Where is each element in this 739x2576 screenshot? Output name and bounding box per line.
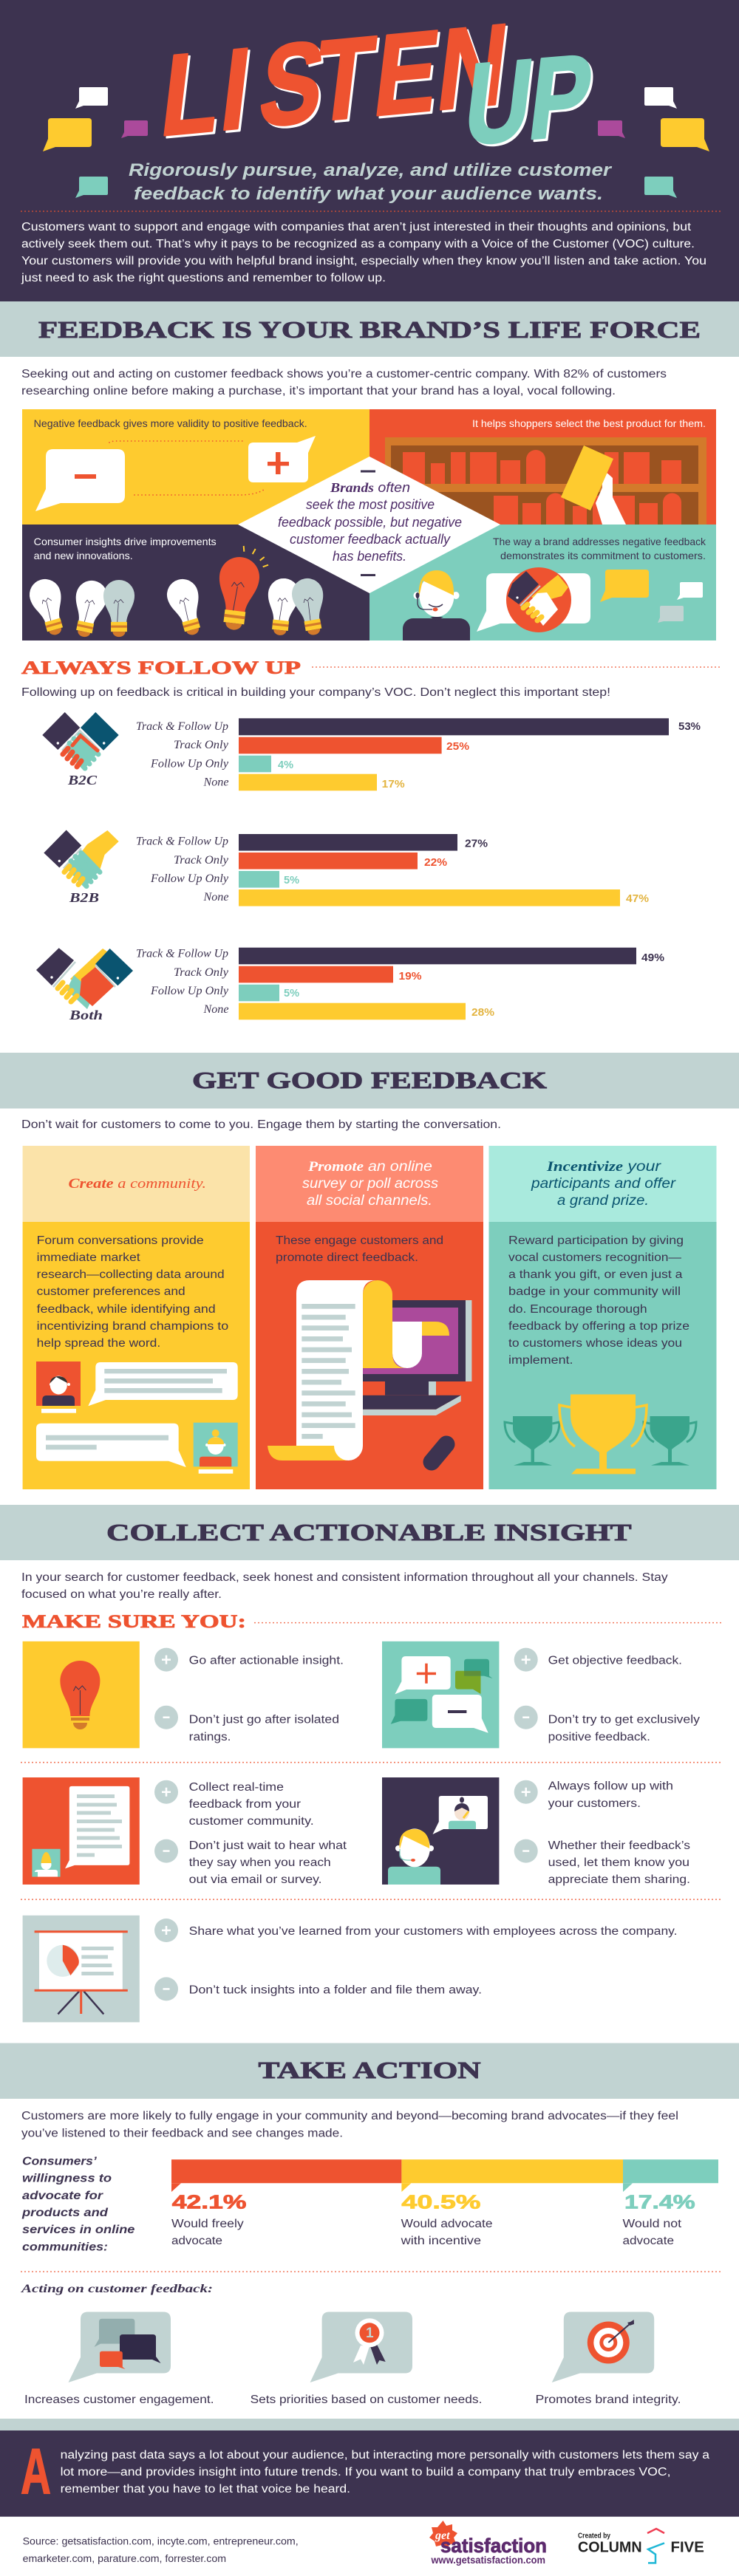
chart: B2C: B2C — [67, 773, 98, 788]
panel: create a community: feedback, while identifying and — [37, 1303, 216, 1316]
text: sources: Source: getsatisfaction.com, incyte.com, entrepreneur.com, — [23, 2535, 299, 2547]
subtitle: feedback to identify what your audience wants. — [134, 184, 603, 204]
chart: advocacy stacked bar: Would not — [622, 2218, 682, 2230]
chart: B2B: Track Only — [174, 854, 229, 867]
text: consumers willingness label: willingness to — [22, 2173, 112, 2185]
panel: follow up tip — [382, 1777, 690, 1886]
panel: promote survey — [256, 1146, 483, 1489]
panel: promote survey: Promote an online — [307, 1159, 432, 1175]
icon: B2B handshake — [44, 830, 119, 886]
icon: customer engagement — [68, 2312, 171, 2382]
text: consumers willingness label: Consumers’ — [22, 2156, 97, 2167]
panel: create a community: incentivizing brand champions to — [37, 1320, 228, 1333]
text: Sets priorities based on customer needs. — [251, 2394, 482, 2406]
icon: ribbon priority: 1 — [366, 2326, 374, 2341]
chart: both: None — [202, 1003, 229, 1016]
panel: create a community: research—collecting data around — [37, 1268, 225, 1281]
panel: brand commitment — [370, 525, 716, 640]
chart: B2C: 4% — [278, 759, 293, 771]
icon: minus bubble — [35, 449, 125, 511]
icon: plus bubble — [248, 436, 316, 482]
logo: get satisfaction: www.getsatisfaction.com — [431, 2555, 545, 2566]
text: collect intro: focused on what you’re really after. — [21, 1588, 222, 1601]
heading: always follow up: ALWAYS FOLLOW UP — [21, 658, 301, 678]
text: follow up intro: Following up on feedback is critical in building your company’s VOC. Don’t neglect this important step! — [21, 686, 610, 699]
panel: create a community: immediate market — [37, 1251, 140, 1264]
panel: shoppers bookshelf — [370, 409, 716, 525]
icon: speech bubbles left — [43, 87, 148, 198]
panel: incentivize: a thank you gift, or even just a — [508, 1268, 683, 1281]
chart: B2C: Track Only — [174, 739, 229, 751]
panel: incentivize: to customers whose ideas you — [508, 1337, 682, 1350]
chart: advocacy stacked bar: 17.4% — [624, 2191, 695, 2213]
section header: get good feedback — [0, 1053, 739, 1108]
panel: consumer insights: Consumer insights drive improvements — [34, 536, 217, 547]
chart: both: Follow Up Only — [150, 985, 229, 997]
text: consumers willingness label: communities: — [22, 2241, 108, 2253]
panel: share insight tip: Share what you’ve learned from your customers with employees across the company. — [189, 1925, 677, 1938]
panel: objective feedback tip: Don’t try to get exclusively — [548, 1714, 700, 1726]
text: consumers willingness label: products and — [21, 2207, 109, 2219]
chart: advocacy stacked bar — [171, 2159, 718, 2247]
panel: conclusion: nalyzing past data says a lot about your audience, but interacting more personally with customers lets them say a — [61, 2449, 709, 2461]
panel: actionable insight tip: Don’t just go after isolated — [189, 1714, 339, 1726]
chart: B2B: B2B — [69, 890, 99, 905]
chart: B2B: Follow Up Only — [150, 872, 229, 885]
chart: B2C: 17% — [382, 778, 405, 790]
chart: both: 5% — [284, 987, 299, 1000]
icon: small bubbles — [600, 570, 703, 623]
panel: negative feedback — [22, 409, 370, 525]
logo: column five: Created by — [578, 2532, 610, 2540]
panel: real-time feedback tip: out via email or survey. — [189, 1873, 322, 1886]
text: consumers willingness label — [21, 2156, 135, 2253]
section header: take action: TAKE ACTION — [259, 2057, 480, 2083]
callout: brands diamond: seek the most positive — [306, 497, 435, 512]
icon: light bulbs — [26, 546, 330, 640]
panel: incentivize: vocal customers recognition— — [508, 1251, 682, 1264]
chart: advocacy stacked bar: 40.5% — [401, 2191, 480, 2213]
panel: incentivize — [489, 1146, 717, 1489]
panel: actionable insight tip: ratings. — [189, 1731, 231, 1743]
chart: advocacy stacked bar: 42.1% — [172, 2191, 247, 2213]
logo: get satisfaction — [429, 2521, 547, 2566]
heading: make sure you: MAKE SURE YOU: — [22, 1612, 246, 1632]
panel: create a community: customer preferences and — [37, 1285, 185, 1298]
intro text — [21, 221, 706, 284]
text: feedback intro: researching online before making a purchase, it’s important that your brand has a loyal, vocal following. — [21, 385, 616, 397]
icon: feedback bubbles — [391, 1656, 492, 1733]
chart: B2B — [44, 830, 649, 906]
panel: consumer insights — [22, 525, 370, 640]
chart: B2C: Track & Follow Up — [136, 720, 228, 733]
logo: get satisfaction: get — [435, 2529, 450, 2542]
section header: get good feedback: GET GOOD FEEDBACK — [192, 1067, 547, 1093]
text: take action intro — [21, 2110, 678, 2139]
chart: B2C: 53% — [678, 720, 701, 733]
chart: advocacy stacked bar: Would advocate — [401, 2218, 492, 2230]
panel: brand benefits — [22, 409, 716, 640]
icon: support agent — [403, 570, 470, 640]
panel: real-time feedback tip: Don’t just wait to hear what — [189, 1839, 347, 1852]
panel: share insight tip: Don’t tuck insights into a folder and file them away. — [189, 1984, 482, 1997]
panel: promote survey: These engage customers and — [276, 1234, 443, 1247]
callout: brands diamond: Brands often — [330, 480, 410, 495]
chart: both: Track Only — [174, 966, 229, 979]
panel: promote survey: all social channels. — [307, 1193, 432, 1209]
panel: promote survey: survey or poll across — [302, 1176, 439, 1192]
chart: B2C — [42, 712, 701, 790]
text: take action intro: Customers are more likely to fully engage in your community and beyond—becoming brand advocates—if they feel — [21, 2110, 678, 2122]
subtitle — [129, 160, 613, 204]
intro text: Customers want to support and engage with companies that aren’t just interested in their thoughts and opinions, but — [21, 221, 692, 233]
chart: both: 19% — [399, 970, 421, 983]
icon: computer and survey scroll — [268, 1280, 471, 1462]
panel: follow up tip: Whether their feedback’s — [548, 1839, 690, 1852]
panel: create a community: Forum conversations provide — [37, 1234, 204, 1247]
icon: hand holding book — [561, 445, 626, 525]
icon: bulb — [60, 1661, 100, 1729]
icon: B2C handshake — [42, 712, 119, 768]
logo: get satisfaction: satisfaction — [440, 2535, 547, 2557]
chart: advocacy stacked bar: advocate — [171, 2235, 222, 2247]
section header: feedback — [0, 301, 739, 357]
chart: B2B: Track & Follow Up — [136, 836, 228, 848]
icon: ribbon priority — [310, 2312, 412, 2382]
panel: follow up tip: appreciate them sharing. — [548, 1873, 690, 1886]
callout: brands diamond — [238, 457, 500, 593]
chart: B2C: Follow Up Only — [150, 758, 229, 771]
section header: take action — [0, 2043, 739, 2099]
text: feedback intro: Seeking out and acting on customer feedback shows you’re a customer-centric company. With 82% of customers — [21, 368, 667, 380]
panel: incentivize: a grand prize. — [557, 1193, 649, 1209]
text: collect intro — [21, 1571, 668, 1601]
panel: consumer insights: and new innovations. — [34, 550, 133, 561]
icon: both handshake — [36, 948, 133, 1009]
panel: incentivize: implement. — [508, 1354, 573, 1367]
logo: column five — [578, 2529, 704, 2563]
chart: both — [36, 948, 664, 1022]
panel: create a community: help spread the word. — [37, 1337, 160, 1350]
chart: advocacy stacked bar: Would freely — [171, 2218, 244, 2230]
chart: both: Track & Follow Up — [136, 948, 228, 960]
panel: objective feedback tip: positive feedback. — [548, 1731, 650, 1743]
chart: both: 28% — [471, 1006, 494, 1019]
title: LISTEN — [157, 2, 516, 163]
panel: incentivize: feedback by offering a top prize — [508, 1320, 689, 1333]
text: sources: emarketer.com, parature.com, forrester.com — [23, 2553, 226, 2564]
text: consumers willingness label: services in online — [22, 2224, 135, 2236]
panel: real-time feedback tip: customer community. — [189, 1815, 314, 1828]
callout: brands diamond: customer feedback actually — [290, 532, 451, 547]
callout: brands diamond: has benefits. — [333, 549, 406, 564]
title: LISTEN — [155, 0, 514, 161]
chart: B2B: 27% — [465, 838, 488, 850]
panel: conclusion — [0, 2419, 739, 2517]
panel: follow up tip: used, let them know you — [548, 1856, 689, 1869]
drop cap: A — [21, 2436, 51, 2508]
logo: column five: COLUMN — [578, 2540, 642, 2556]
panel: shoppers bookshelf: It helps shoppers select the best product for them. — [472, 417, 706, 429]
panel: incentivize: Incentivize your — [546, 1159, 661, 1175]
callout: brands diamond: feedback possible, but negative — [278, 515, 462, 530]
panel: real-time feedback tip — [23, 1777, 347, 1886]
hero panel — [0, 0, 739, 301]
icon: document and avatar — [32, 1786, 129, 1876]
chart: B2B: None — [202, 891, 229, 903]
section header: collect actionable insight — [0, 1505, 739, 1560]
panel: real-time feedback tip: Collect real-time — [189, 1781, 284, 1794]
panel: incentivize: participants and offer — [531, 1176, 676, 1192]
icon: handshake bubble — [477, 567, 590, 632]
chart: advocacy stacked bar: advocate — [622, 2235, 674, 2247]
panel: follow up tip: your customers. — [548, 1797, 641, 1810]
icon: speech bubbles right — [598, 87, 709, 198]
subtitle: Rigorously pursue, analyze, and utilize customer — [129, 160, 613, 180]
icon: trophies — [505, 1395, 696, 1474]
chart: B2C: None — [202, 776, 229, 789]
chart: B2B: 22% — [424, 856, 447, 869]
panel: objective feedback tip: Get objective feedback. — [548, 1655, 682, 1667]
panel: brand commitment: demonstrates its commitment to customers. — [500, 550, 706, 561]
text: take action intro: you’ve listened to their feedback and see changes made. — [21, 2128, 343, 2139]
panel: brand commitment: The way a brand addresses negative feedback — [493, 536, 706, 547]
panel: negative feedback: Negative feedback gives more validity to positive feedback. — [34, 417, 307, 429]
heading: acting on customer feedback: Acting on customer feedback: — [21, 2283, 213, 2295]
panel: incentivize: badge in your community will — [508, 1285, 681, 1298]
intro text: just need to ask the right questions and remember to follow up. — [21, 272, 386, 284]
panel: follow up tip: Always follow up with — [548, 1780, 673, 1792]
icon: presentation board — [35, 1930, 128, 2014]
section header: collect actionable insight: COLLECT ACTIONABLE INSIGHT — [106, 1519, 632, 1545]
panel: real-time feedback tip: they say when you reach — [189, 1856, 331, 1869]
text: Increases customer engagement. — [24, 2394, 214, 2406]
logo: column five: FIVE — [671, 2540, 704, 2556]
text: sources — [23, 2535, 299, 2564]
panel: conclusion: remember that you have to let that voice be heard. — [61, 2483, 350, 2495]
panel: incentivize: Reward participation by giving — [508, 1234, 684, 1247]
panel: real-time feedback tip: feedback from your — [189, 1798, 301, 1811]
chart: advocacy stacked bar: with incentive — [401, 2235, 481, 2247]
intro text: actively seek them out. That’s why it pays to be recognized as a company with a Voice of the Customer (VOC) culture. — [21, 238, 695, 250]
panel: objective feedback tip — [382, 1641, 700, 1748]
text: Promotes brand integrity. — [535, 2394, 681, 2406]
icon: agent and customer — [388, 1796, 488, 1885]
text: collect intro: In your search for customer feedback, seek honest and consistent information throughout all your channels. Stay — [21, 1571, 668, 1584]
icon: chat illustration — [36, 1362, 238, 1474]
title: UP — [460, 33, 601, 172]
panel: create a community — [23, 1146, 250, 1489]
text: consumers willingness label: advocate for — [22, 2190, 103, 2202]
panel: create a community: Create a community. — [68, 1176, 206, 1192]
text: feedback intro — [21, 368, 667, 397]
chart: B2C: 25% — [446, 740, 469, 753]
chart: B2B: 5% — [284, 874, 299, 886]
chart: B2B: 47% — [626, 892, 649, 905]
intro text: Your customers will provide you with helpful brand insight, especially when they know you’ll listen and take action. You — [21, 255, 706, 267]
panel: actionable insight tip: Go after actionable insight. — [189, 1655, 344, 1667]
text: get good feedback intro: Don’t wait for customers to come to you. Engage them by starting the conversation. — [21, 1118, 501, 1131]
chart: both: Both — [69, 1008, 103, 1022]
panel: share insight tip — [23, 1916, 678, 2022]
section header: feedback: FEEDBACK IS YOUR BRAND’S LIFE FORCE — [38, 316, 701, 343]
title: UP — [458, 30, 599, 170]
panel: promote survey: promote direct feedback. — [276, 1251, 418, 1264]
chart: both: 49% — [641, 952, 664, 964]
panel: conclusion: lot more—and provides insight into future trends. If you want to build a company that truly embraces VOC, — [61, 2466, 671, 2478]
icon: target integrity — [552, 2312, 654, 2382]
panel: incentivize: do. Encourage thorough — [508, 1303, 647, 1316]
panel: actionable insight tip — [23, 1641, 344, 1748]
